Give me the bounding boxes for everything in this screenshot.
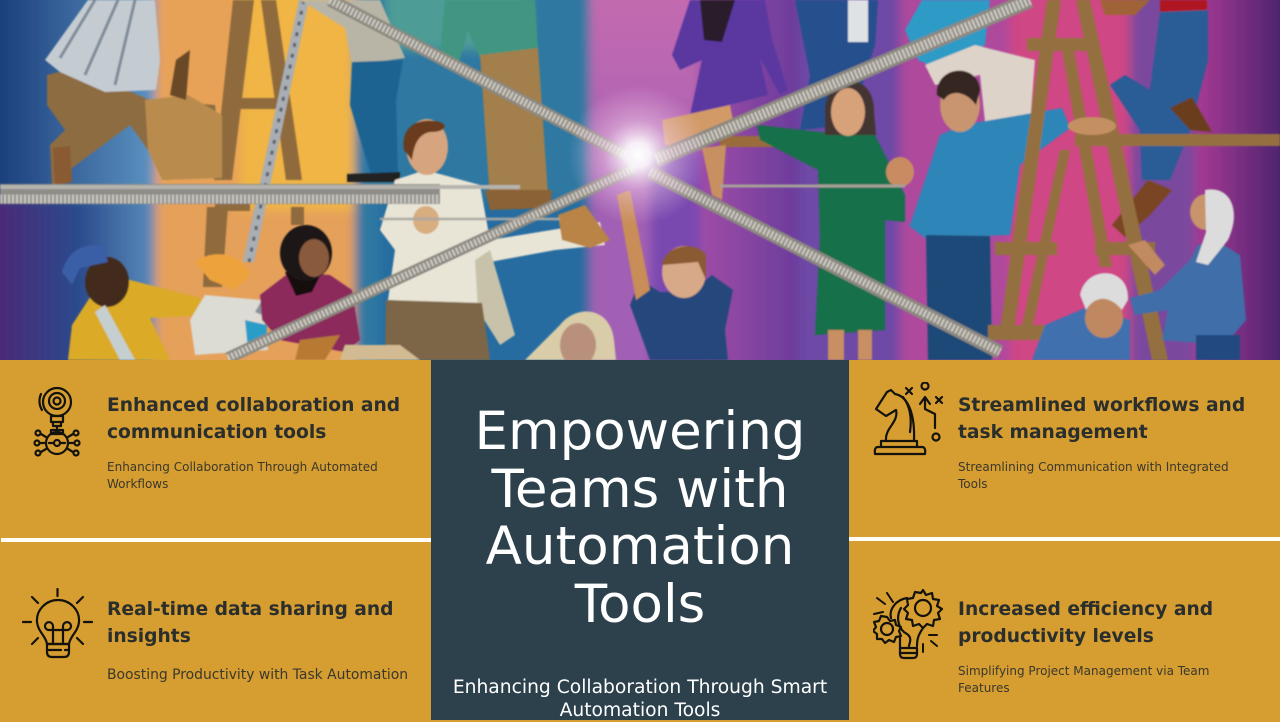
text: workflows detail: Streamlining Communication with Integrated [958, 460, 1229, 474]
text: collaboration detail [107, 460, 378, 491]
figure: seated person, teal shirt and white trousers [905, 0, 1035, 125]
text: efficiency detail [958, 664, 1209, 695]
light burst where ropes meet [568, 85, 708, 225]
figure: person in blue suit [795, 0, 878, 130]
text: workflows detail: Tools [958, 477, 988, 491]
icon: light bulb [22, 588, 94, 658]
icon: bulb with gears [873, 588, 944, 660]
ropes [0, 0, 1030, 358]
wooden ladder left [203, 0, 304, 287]
title: Teams with [492, 459, 788, 520]
divider [849, 537, 1280, 541]
heading: workflows [958, 395, 1245, 443]
subtitle [453, 677, 827, 721]
subtitle: Enhancing Collaboration Through Smart [453, 677, 827, 698]
figure: man in blue hoodie [617, 190, 733, 360]
text: efficiency detail: Simplifying Project Management via Team [958, 664, 1209, 678]
figure: woman in purple dress on wooden table [662, 0, 788, 200]
heading: workflows: Streamlined workflows and [958, 395, 1245, 416]
text: efficiency detail: Features [958, 681, 1010, 695]
text: real-time detail: Boosting Productivity with Task Automation [107, 667, 408, 683]
heading: real-time data [107, 599, 394, 647]
figure: kneeling man in striped shirt [45, 0, 222, 186]
title: Automation [486, 516, 794, 577]
divider [1, 538, 431, 542]
panel: left features [0, 360, 431, 720]
figure: woman in white hood [1128, 189, 1246, 360]
panel: right features [849, 360, 1280, 720]
figure: man in blue shirt [908, 71, 1070, 360]
heading: efficiency: Increased efficiency and [958, 599, 1213, 620]
suit shirt [848, 0, 868, 42]
text: workflows detail [958, 460, 1229, 491]
wooden ladder right [988, 0, 1280, 360]
text: collaboration detail: Enhancing Collaboration Through Automated [107, 460, 378, 474]
figure: child in orange hat [190, 254, 292, 355]
background colour stripes [0, 0, 1280, 400]
figure: man in blue hat and yellow jacket [62, 245, 205, 360]
figure: blonde woman [525, 311, 616, 367]
figure: man in white shirt [380, 119, 610, 360]
figure: standing person in blue trousers [300, 0, 405, 182]
heading: collaboration: communication tools [107, 422, 326, 443]
metal strip [243, 0, 309, 262]
heading: collaboration: Enhanced collaboration and [107, 395, 400, 416]
heading: collaboration [107, 395, 400, 443]
heading: efficiency [958, 599, 1213, 647]
icon: gear bulb with circuit [33, 386, 81, 457]
figure: man in white turban [1032, 273, 1130, 360]
figure: climbing man in jeans [1100, 0, 1212, 237]
title: Empowering [475, 401, 805, 462]
heading: efficiency: productivity levels [958, 626, 1154, 647]
title [475, 401, 805, 635]
title: Tools [575, 574, 705, 635]
figure: woman in magenta sweater [260, 225, 420, 360]
panel: centre title [431, 360, 849, 720]
heading: workflows: task management [958, 422, 1148, 443]
heading: real-time data: Real-time data sharing and [107, 599, 394, 620]
figure: person in green shirt [440, 0, 552, 210]
figure: woman in green suit [757, 80, 914, 360]
icon: chess knight with strategy [874, 382, 944, 456]
subtitle: Automation Tools [560, 700, 720, 721]
illustration: team connected by ropes [0, 0, 1280, 360]
text: collaboration detail: Workflows [107, 477, 168, 491]
heading: real-time data: insights [107, 626, 191, 647]
